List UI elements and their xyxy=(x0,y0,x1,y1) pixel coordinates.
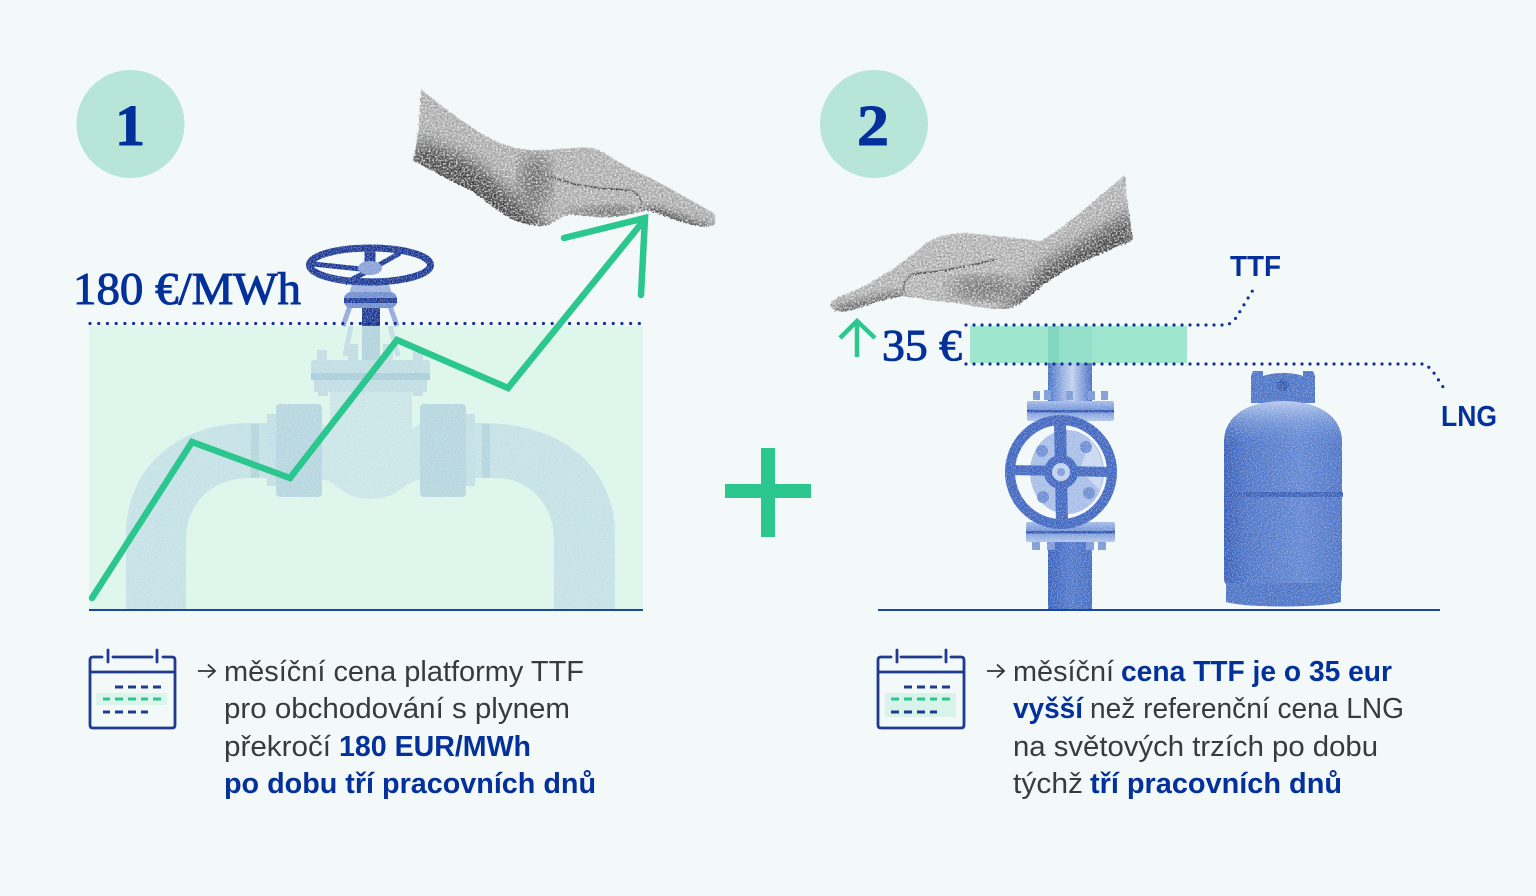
label: 180 €/MWh: 180 €/MWh xyxy=(73,263,301,314)
text block: condition 2: týchž xyxy=(1013,768,1083,800)
text block: condition 2: měsíční xyxy=(1013,656,1114,688)
dotted line: LNG xyxy=(966,364,1447,393)
dotted line: TTF xyxy=(966,285,1256,325)
baseline xyxy=(89,609,643,611)
baseline xyxy=(878,609,1440,611)
chart panel 2: TTF vs LNG xyxy=(840,251,1497,611)
icon: green up arrow xyxy=(840,321,875,357)
label: LNG: LNG xyxy=(1441,401,1497,433)
badge: number 1: 1 xyxy=(115,93,145,158)
threshold area xyxy=(89,326,643,610)
text block: condition 2: než referenční cena LNG xyxy=(1090,693,1404,725)
illustration: hand above chart 1 xyxy=(412,89,716,228)
text block: condition 2: na světových trzích po dobu xyxy=(1013,731,1378,763)
text block: condition 2: tří pracovních dnů xyxy=(1090,768,1342,800)
text block: condition 2 xyxy=(987,656,1404,800)
icon: calendar 2 xyxy=(878,650,964,728)
text block: condition 1: měsíční cena platformy TTF xyxy=(224,656,584,688)
icon: arrow xyxy=(198,664,215,678)
icon: faded pipe with valve xyxy=(126,326,615,610)
label: TTF: TTF xyxy=(1230,251,1281,283)
price gap band xyxy=(970,326,1187,363)
badge: number 2 xyxy=(820,70,928,178)
icon: calendar 1 xyxy=(90,650,175,728)
text block: condition 2: cena TTF je o 35 eur xyxy=(1121,656,1392,688)
text block: condition 1 xyxy=(198,656,596,800)
dotted threshold line xyxy=(90,322,643,325)
text block: condition 1: překročí xyxy=(224,731,331,763)
icon: arrow xyxy=(987,664,1004,678)
text block: condition 2: vyšší xyxy=(1013,693,1084,725)
icon: valve handwheel xyxy=(310,248,430,326)
illustration: hand above chart 2 xyxy=(830,176,1133,312)
badge: number 1 xyxy=(76,70,184,178)
rising price line with arrow xyxy=(92,218,645,598)
text block: condition 1: pro obchodování s plynem xyxy=(224,693,570,725)
text block: condition 1: 180 EUR/MWh xyxy=(339,731,531,763)
symbol: plus xyxy=(725,448,811,537)
badge: number 2: 2 xyxy=(857,93,889,158)
label: 35 €: 35 € xyxy=(882,321,962,370)
chart panel 1: price threshold xyxy=(73,218,645,611)
text block: condition 1: po dobu tří pracovních dnů xyxy=(224,768,596,800)
icon: blue gas cylinder xyxy=(1224,371,1343,606)
icon: blue pipe with wheel valve xyxy=(1010,326,1115,610)
